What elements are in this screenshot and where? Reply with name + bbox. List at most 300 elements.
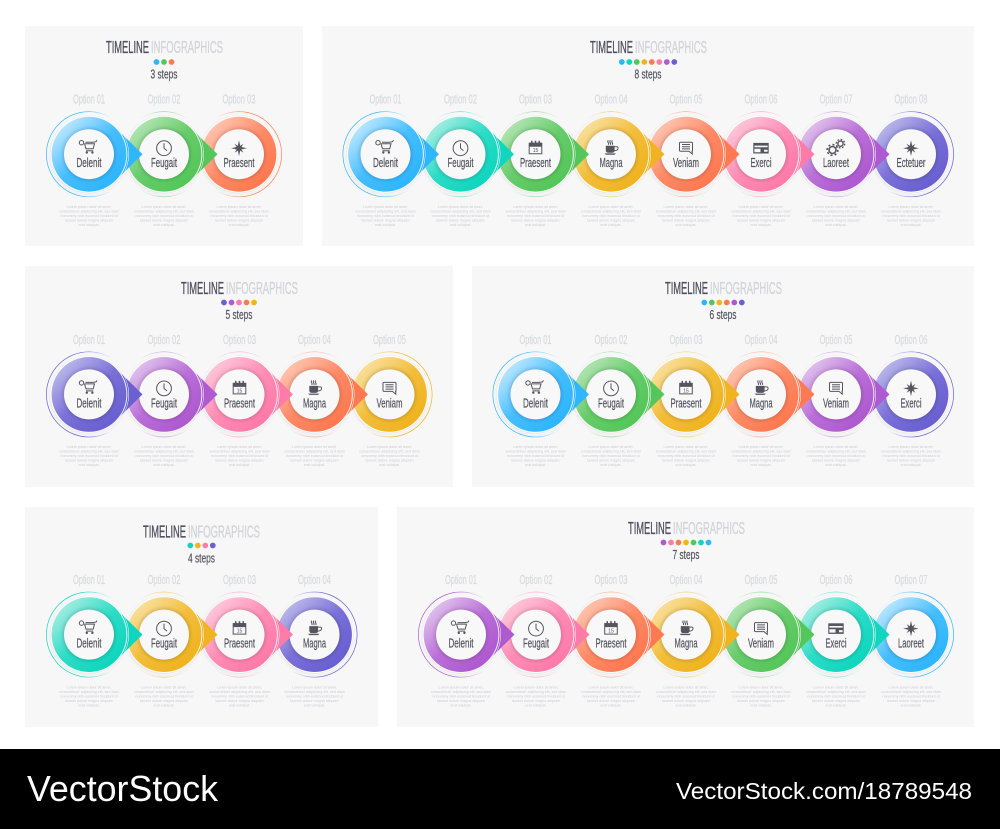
step 1: Lorem ipsum dolor sit amet, xyxy=(513,445,558,449)
step 5 xyxy=(793,332,890,467)
step 2: Feugait xyxy=(151,155,177,170)
step 4: Lorem ipsum dolor sit amet, xyxy=(589,205,633,209)
step 1: Delenit xyxy=(523,395,548,410)
step 3: Praesent xyxy=(596,636,627,651)
step 5: consectetuer adipiscing elit, sed diam xyxy=(656,209,716,213)
step 4: Option 04 xyxy=(594,92,628,107)
step 7: nonummy nibh euismod tincidunt ut xyxy=(807,214,865,218)
step 1: laoreet dolore magna aliquam xyxy=(437,699,485,703)
step 5: Veniam xyxy=(673,155,699,170)
step 4: consectetuer adipiscing elit, sed diam xyxy=(731,450,791,454)
step 3: erat volutpat. xyxy=(229,463,250,467)
step 1: laoreet dolore magna aliquam xyxy=(511,459,560,463)
step 5: erat volutpat. xyxy=(825,463,847,467)
step 6: consectetuer adipiscing elit, sed diam xyxy=(806,690,866,694)
step 3: nonummy nibh euismod tincidunt ut xyxy=(582,694,640,698)
step 3: nonummy nibh euismod tincidunt ut xyxy=(507,214,564,218)
step 5: Veniam xyxy=(823,395,849,410)
step 2: erat volutpat. xyxy=(153,223,175,227)
step 1: Lorem ipsum dolor sit amet, xyxy=(67,685,111,689)
step 6: nonummy nibh euismod tincidunt ut xyxy=(732,214,790,218)
step 5: Lorem ipsum dolor sit amet, xyxy=(739,685,783,689)
step 4: consectetuer adipiscing elit, sed diam xyxy=(581,209,641,213)
step 1: Option 01 xyxy=(370,92,402,107)
step 6: erat volutpat. xyxy=(750,223,772,227)
step 1 xyxy=(343,92,439,227)
step 1: nonummy nibh euismod tincidunt ut xyxy=(60,694,118,698)
step 1: Lorem ipsum dolor sit amet, xyxy=(363,205,408,209)
heading: TIMELINE xyxy=(628,518,671,538)
heading xyxy=(181,278,298,298)
step 2: consectetuer adipiscing elit, sed diam xyxy=(134,450,194,454)
step 3: Lorem ipsum dolor sit amet, xyxy=(217,445,262,449)
step 2: Feugait xyxy=(448,155,474,170)
step 6: nonummy nibh euismod tincidunt ut xyxy=(882,454,940,458)
step 6: Exerci xyxy=(826,636,847,651)
step 4: laoreet dolore magna aliquam xyxy=(662,699,710,703)
step 4: Magna xyxy=(599,155,623,170)
step 3: consectetuer adipiscing elit, sed diam xyxy=(209,690,270,694)
step 3 xyxy=(643,332,740,467)
step 2 xyxy=(568,332,664,467)
step 7: consectetuer adipiscing elit, sed diam xyxy=(806,209,866,213)
step 3: consectetuer adipiscing elit, sed diam xyxy=(209,450,270,454)
step 6: nonummy nibh euismod tincidunt ut xyxy=(807,694,865,698)
step 2: Option 02 xyxy=(520,572,552,587)
step 6: Lorem ipsum dolor sit amet, xyxy=(889,445,933,449)
step 3: nonummy nibh euismod tincidunt ut xyxy=(210,214,268,218)
step 2: consectetuer adipiscing elit, sed diam xyxy=(506,690,566,694)
step 5: consectetuer adipiscing elit, sed diam xyxy=(359,450,420,454)
step 3 xyxy=(197,572,293,707)
step 3: consectetuer adipiscing elit, sed diam xyxy=(581,690,641,694)
step 4 xyxy=(568,92,664,227)
step 2: Feugait xyxy=(151,636,177,651)
step 3 xyxy=(197,332,293,467)
step 6: laoreet dolore magna aliquam xyxy=(812,699,860,703)
step 3: Lorem ipsum dolor sit amet, xyxy=(513,205,558,209)
step 5: Option 05 xyxy=(670,92,702,107)
step 3: nonummy nibh euismod tincidunt ut xyxy=(657,454,715,458)
step 4: Magna xyxy=(749,395,773,410)
step 5: laoreet dolore magna aliquam xyxy=(737,699,785,703)
step 1: Lorem ipsum dolor sit amet, xyxy=(67,445,111,449)
step 2: Option 02 xyxy=(148,332,180,347)
step 1: laoreet dolore magna aliquam xyxy=(361,218,410,222)
panel: 5 steps xyxy=(25,266,453,487)
step 1: nonummy nibh euismod tincidunt ut xyxy=(432,694,490,698)
step 1: nonummy nibh euismod tincidunt ut xyxy=(60,214,118,218)
step 3: Option 03 xyxy=(519,92,552,107)
step 2: Lorem ipsum dolor sit amet, xyxy=(142,205,186,209)
heading: INFOGRAPHICS xyxy=(151,37,223,57)
step 5: Lorem ipsum dolor sit amet, xyxy=(664,205,708,209)
step 3: erat volutpat. xyxy=(229,703,250,707)
step 6: Option 06 xyxy=(744,92,778,107)
step 6: erat volutpat. xyxy=(825,703,847,707)
step 4: nonummy nibh euismod tincidunt ut xyxy=(657,694,715,698)
step 5: laoreet dolore magna aliquam xyxy=(365,459,414,463)
footer logo: VectorStock xyxy=(27,768,219,809)
step 2 xyxy=(418,92,514,227)
step 1: laoreet dolore magna aliquam xyxy=(65,459,113,463)
step 1: consectetuer adipiscing elit, sed diam xyxy=(59,690,119,694)
step 4: Option 04 xyxy=(744,332,778,347)
step 5: Lorem ipsum dolor sit amet, xyxy=(814,445,858,449)
step 6: Exerci xyxy=(750,155,772,170)
step count: 5 steps xyxy=(226,307,253,322)
step 8: Option 08 xyxy=(894,92,928,107)
step 7: consectetuer adipiscing elit, sed diam xyxy=(881,690,941,694)
step count: 8 steps xyxy=(634,66,662,82)
step 4: nonummy nibh euismod tincidunt ut xyxy=(732,454,790,458)
step 4: erat volutpat. xyxy=(304,463,325,467)
heading: TIMELINE xyxy=(106,37,149,57)
step 1: erat volutpat. xyxy=(375,223,396,227)
heading: INFOGRAPHICS xyxy=(226,278,298,298)
panel: 6 steps xyxy=(472,266,974,487)
step 6: Option 06 xyxy=(820,572,852,587)
step 4: Magna xyxy=(303,636,326,651)
step 4 xyxy=(643,572,740,707)
step 6 xyxy=(718,92,814,227)
step 4: Magna xyxy=(674,636,698,651)
step 3 xyxy=(568,572,664,707)
step 4: nonummy nibh euismod tincidunt ut xyxy=(286,454,343,458)
step 3: erat volutpat. xyxy=(525,223,546,227)
step 6: laoreet dolore magna aliquam xyxy=(887,459,935,463)
step 2: consectetuer adipiscing elit, sed diam xyxy=(134,209,194,213)
step 2: consectetuer adipiscing elit, sed diam xyxy=(581,450,641,454)
step 1 xyxy=(46,332,142,467)
step 2: Lorem ipsum dolor sit amet, xyxy=(438,205,483,209)
step 3: laoreet dolore magna aliquam xyxy=(587,699,635,703)
step 8: laoreet dolore magna aliquam xyxy=(887,218,935,222)
step 3 xyxy=(493,92,589,227)
heading: TIMELINE xyxy=(143,522,186,542)
step 6: Lorem ipsum dolor sit amet, xyxy=(814,685,858,689)
step 1: Option 01 xyxy=(73,332,105,347)
step 5: erat volutpat. xyxy=(675,223,697,227)
step 5 xyxy=(718,572,814,707)
step 1 xyxy=(46,92,142,227)
step 4: Magna xyxy=(303,395,326,410)
step 1: nonummy nibh euismod tincidunt ut xyxy=(60,454,118,458)
step 3: Praesent xyxy=(224,395,255,410)
step 2: nonummy nibh euismod tincidunt ut xyxy=(135,214,193,218)
step 5: Option 05 xyxy=(373,332,406,347)
step 1: Lorem ipsum dolor sit amet, xyxy=(67,205,111,209)
step 2: laoreet dolore magna aliquam xyxy=(436,218,485,222)
step 7: Option 07 xyxy=(820,92,852,107)
step 1 xyxy=(493,332,589,467)
step 4: laoreet dolore magna aliquam xyxy=(290,699,339,703)
step 4: consectetuer adipiscing elit, sed diam xyxy=(656,690,716,694)
step 2: Option 02 xyxy=(148,572,180,587)
step 5: Lorem ipsum dolor sit amet, xyxy=(367,445,412,449)
step 2: Option 02 xyxy=(594,332,628,347)
step 2: erat volutpat. xyxy=(153,463,175,467)
colour dots xyxy=(701,300,745,305)
step 3: Lorem ipsum dolor sit amet, xyxy=(589,685,633,689)
step 5: consectetuer adipiscing elit, sed diam xyxy=(731,690,791,694)
step 2 xyxy=(121,332,218,467)
step 3: Option 03 xyxy=(670,332,702,347)
step 4: Lorem ipsum dolor sit amet, xyxy=(292,445,337,449)
step 2: laoreet dolore magna aliquam xyxy=(140,699,188,703)
panel: 4 steps xyxy=(25,507,378,727)
step 7: Lorem ipsum dolor sit amet, xyxy=(889,685,933,689)
step 2: Lorem ipsum dolor sit amet, xyxy=(142,685,186,689)
colour dots xyxy=(661,540,711,545)
step 6: laoreet dolore magna aliquam xyxy=(737,218,785,222)
step 3: consectetuer adipiscing elit, sed diam xyxy=(209,209,269,213)
step 3: laoreet dolore magna aliquam xyxy=(215,699,264,703)
step 4: Lorem ipsum dolor sit amet, xyxy=(664,685,708,689)
step count: 7 steps xyxy=(672,547,700,562)
step 3: Praesent xyxy=(520,155,551,170)
step 3: consectetuer adipiscing elit, sed diam xyxy=(656,450,716,454)
step 4 xyxy=(272,572,357,707)
step 5: erat volutpat. xyxy=(750,703,772,707)
step 3: Praesent xyxy=(224,155,255,170)
step 1: Option 01 xyxy=(520,332,552,347)
step 5: Option 05 xyxy=(744,572,778,587)
step 4: consectetuer adipiscing elit, sed diam xyxy=(284,690,345,694)
step 7 xyxy=(793,92,890,227)
colour dots xyxy=(619,59,677,65)
step 4 xyxy=(718,332,814,467)
colour dots xyxy=(187,543,216,548)
step 4: Option 04 xyxy=(298,332,331,347)
step 4 xyxy=(272,332,368,467)
step 2: Lorem ipsum dolor sit amet, xyxy=(589,445,633,449)
step 3: Option 03 xyxy=(222,92,256,107)
step 3: Praesent xyxy=(670,395,702,410)
step 8 xyxy=(868,92,954,227)
step 3: erat volutpat. xyxy=(228,223,250,227)
step 1: nonummy nibh euismod tincidunt ut xyxy=(507,454,564,458)
step 1: Option 01 xyxy=(73,572,105,587)
colour dots xyxy=(221,300,257,305)
heading: INFOGRAPHICS xyxy=(188,522,260,542)
step 5: consectetuer adipiscing elit, sed diam xyxy=(806,450,866,454)
step 3: erat volutpat. xyxy=(600,703,622,707)
step 2: laoreet dolore magna aliquam xyxy=(512,699,560,703)
step 5: nonummy nibh euismod tincidunt ut xyxy=(361,454,418,458)
heading: TIMELINE xyxy=(590,37,633,57)
step 7: erat volutpat. xyxy=(900,703,922,707)
step 5: nonummy nibh euismod tincidunt ut xyxy=(807,454,865,458)
step 2 xyxy=(121,572,218,707)
step 7: Option 07 xyxy=(894,572,928,587)
step 5 xyxy=(347,332,432,467)
step 2: Option 02 xyxy=(444,92,477,107)
step 7: Lorem ipsum dolor sit amet, xyxy=(814,205,858,209)
step 1: Delenit xyxy=(76,155,102,170)
step 1: erat volutpat. xyxy=(78,463,100,467)
step 2: Feugait xyxy=(598,395,624,410)
step 6: Option 06 xyxy=(894,332,928,347)
step 2 xyxy=(121,92,218,227)
step 1: Option 01 xyxy=(445,572,477,587)
heading xyxy=(628,518,745,538)
step 8: erat volutpat. xyxy=(900,223,922,227)
step 1: consectetuer adipiscing elit, sed diam xyxy=(431,690,491,694)
step 2 xyxy=(493,572,590,707)
step 6: consectetuer adipiscing elit, sed diam xyxy=(881,450,941,454)
step 1: laoreet dolore magna aliquam xyxy=(65,218,113,222)
step 3: Lorem ipsum dolor sit amet, xyxy=(217,685,262,689)
step 6 xyxy=(793,572,890,707)
step count: 4 steps xyxy=(188,550,215,566)
step 2: Feugait xyxy=(523,636,549,651)
step 3: consectetuer adipiscing elit, sed diam xyxy=(505,209,566,213)
step 1: nonummy nibh euismod tincidunt ut xyxy=(357,214,414,218)
step 4: Lorem ipsum dolor sit amet, xyxy=(292,685,337,689)
step 2: erat volutpat. xyxy=(525,703,547,707)
step 5: Option 05 xyxy=(820,332,852,347)
step 3: Option 03 xyxy=(223,572,256,587)
step 4: erat volutpat. xyxy=(304,703,325,707)
step 5: laoreet dolore magna aliquam xyxy=(812,459,860,463)
panel: 7 steps xyxy=(397,507,974,727)
step count: 3 steps xyxy=(150,66,178,82)
step 4: erat volutpat. xyxy=(675,703,697,707)
step 3: nonummy nibh euismod tincidunt ut xyxy=(211,694,268,698)
heading: TIMELINE xyxy=(181,278,224,298)
step 1: Delenit xyxy=(448,636,474,651)
step 4: Option 04 xyxy=(670,572,702,587)
step 1 xyxy=(46,572,142,707)
colour dots xyxy=(154,59,174,65)
step 2: nonummy nibh euismod tincidunt ut xyxy=(507,694,565,698)
heading: INFOGRAPHICS xyxy=(710,278,782,298)
step 3: laoreet dolore magna aliquam xyxy=(215,459,264,463)
step 2: consectetuer adipiscing elit, sed diam xyxy=(430,209,491,213)
step 2: laoreet dolore magna aliquam xyxy=(587,459,635,463)
step count: 6 steps xyxy=(710,307,737,322)
panel: 8 steps xyxy=(322,26,974,246)
step 4: laoreet dolore magna aliquam xyxy=(737,459,785,463)
step 2: Lorem ipsum dolor sit amet, xyxy=(142,445,186,449)
step 1: consectetuer adipiscing elit, sed diam xyxy=(505,450,566,454)
step 7: laoreet dolore magna aliquam xyxy=(887,699,935,703)
step 6 xyxy=(868,332,954,467)
step 2: nonummy nibh euismod tincidunt ut xyxy=(135,694,193,698)
step 1: laoreet dolore magna aliquam xyxy=(65,699,113,703)
step 5: Veniam xyxy=(376,395,402,410)
step 3 xyxy=(196,92,282,227)
heading xyxy=(590,37,707,57)
step 3: erat volutpat. xyxy=(675,463,697,467)
step 8: Ectetuer xyxy=(896,155,926,170)
step 7: erat volutpat. xyxy=(825,223,847,227)
step 5: laoreet dolore magna aliquam xyxy=(662,218,710,222)
step 2: nonummy nibh euismod tincidunt ut xyxy=(432,214,489,218)
step 1: Lorem ipsum dolor sit amet, xyxy=(439,685,483,689)
step 3: nonummy nibh euismod tincidunt ut xyxy=(211,454,268,458)
step 3: Option 03 xyxy=(594,572,628,587)
step 5: erat volutpat. xyxy=(379,463,400,467)
step 2: nonummy nibh euismod tincidunt ut xyxy=(135,454,193,458)
step 3: Option 03 xyxy=(223,332,256,347)
step 1: Delenit xyxy=(373,155,398,170)
step 1: Delenit xyxy=(76,636,102,651)
step 6: consectetuer adipiscing elit, sed diam xyxy=(731,209,791,213)
step 5: nonummy nibh euismod tincidunt ut xyxy=(657,214,715,218)
step 1: Delenit xyxy=(76,395,102,410)
heading: INFOGRAPHICS xyxy=(635,37,707,57)
step 4: laoreet dolore magna aliquam xyxy=(587,218,635,222)
step 6: Exerci xyxy=(900,395,922,410)
step 2: erat volutpat. xyxy=(600,463,622,467)
step 6: erat volutpat. xyxy=(900,463,922,467)
step 4: erat volutpat. xyxy=(750,463,772,467)
step 3: laoreet dolore magna aliquam xyxy=(511,218,560,222)
step 4: nonummy nibh euismod tincidunt ut xyxy=(286,694,343,698)
step 3: Lorem ipsum dolor sit amet, xyxy=(664,445,708,449)
step 2: Option 02 xyxy=(148,92,180,107)
heading xyxy=(143,522,260,542)
heading xyxy=(665,278,782,298)
step 1 xyxy=(418,572,514,707)
step 2: Feugait xyxy=(151,395,177,410)
step 8: Lorem ipsum dolor sit amet, xyxy=(889,205,933,209)
step 1: consectetuer adipiscing elit, sed diam xyxy=(59,450,119,454)
step 3: Lorem ipsum dolor sit amet, xyxy=(217,205,261,209)
step 2: erat volutpat. xyxy=(450,223,471,227)
step 2: laoreet dolore magna aliquam xyxy=(140,459,188,463)
heading: INFOGRAPHICS xyxy=(673,518,745,538)
step 7 xyxy=(868,572,954,707)
step 4: Lorem ipsum dolor sit amet, xyxy=(739,445,783,449)
step 3: laoreet dolore magna aliquam xyxy=(215,218,263,222)
step 8: consectetuer adipiscing elit, sed diam xyxy=(881,209,941,213)
step 2: erat volutpat. xyxy=(153,703,175,707)
step 5 xyxy=(643,92,740,227)
step 5: Veniam xyxy=(748,636,774,651)
step 1: Option 01 xyxy=(73,92,105,107)
step 3: Praesent xyxy=(224,636,255,651)
step 8: nonummy nibh euismod tincidunt ut xyxy=(882,214,940,218)
heading: TIMELINE xyxy=(665,278,708,298)
step 2: laoreet dolore magna aliquam xyxy=(140,218,188,222)
step 4: laoreet dolore magna aliquam xyxy=(290,459,339,463)
step 1: erat volutpat. xyxy=(78,703,100,707)
footer bar xyxy=(0,749,1000,829)
step 2: consectetuer adipiscing elit, sed diam xyxy=(134,690,194,694)
step 4: Option 04 xyxy=(298,572,331,587)
step 1: erat volutpat. xyxy=(78,223,100,227)
step 2: Lorem ipsum dolor sit amet, xyxy=(514,685,558,689)
step 2: nonummy nibh euismod tincidunt ut xyxy=(582,454,640,458)
step 6: Lorem ipsum dolor sit amet, xyxy=(739,205,783,209)
step 4: consectetuer adipiscing elit, sed diam xyxy=(284,450,345,454)
step 7: laoreet dolore magna aliquam xyxy=(812,218,860,222)
step 7: Laoreet xyxy=(898,636,924,651)
step 4: erat volutpat. xyxy=(600,223,622,227)
step 1: consectetuer adipiscing elit, sed diam xyxy=(355,209,416,213)
panel: 3 steps xyxy=(25,26,303,246)
footer url: VectorStock.com/18789548 xyxy=(676,778,972,804)
step 7: nonummy nibh euismod tincidunt ut xyxy=(882,694,940,698)
step 1: consectetuer adipiscing elit, sed diam xyxy=(59,209,119,213)
step 5: nonummy nibh euismod tincidunt ut xyxy=(732,694,790,698)
step 3: laoreet dolore magna aliquam xyxy=(662,459,710,463)
step 4: nonummy nibh euismod tincidunt ut xyxy=(582,214,640,218)
heading xyxy=(106,37,223,57)
